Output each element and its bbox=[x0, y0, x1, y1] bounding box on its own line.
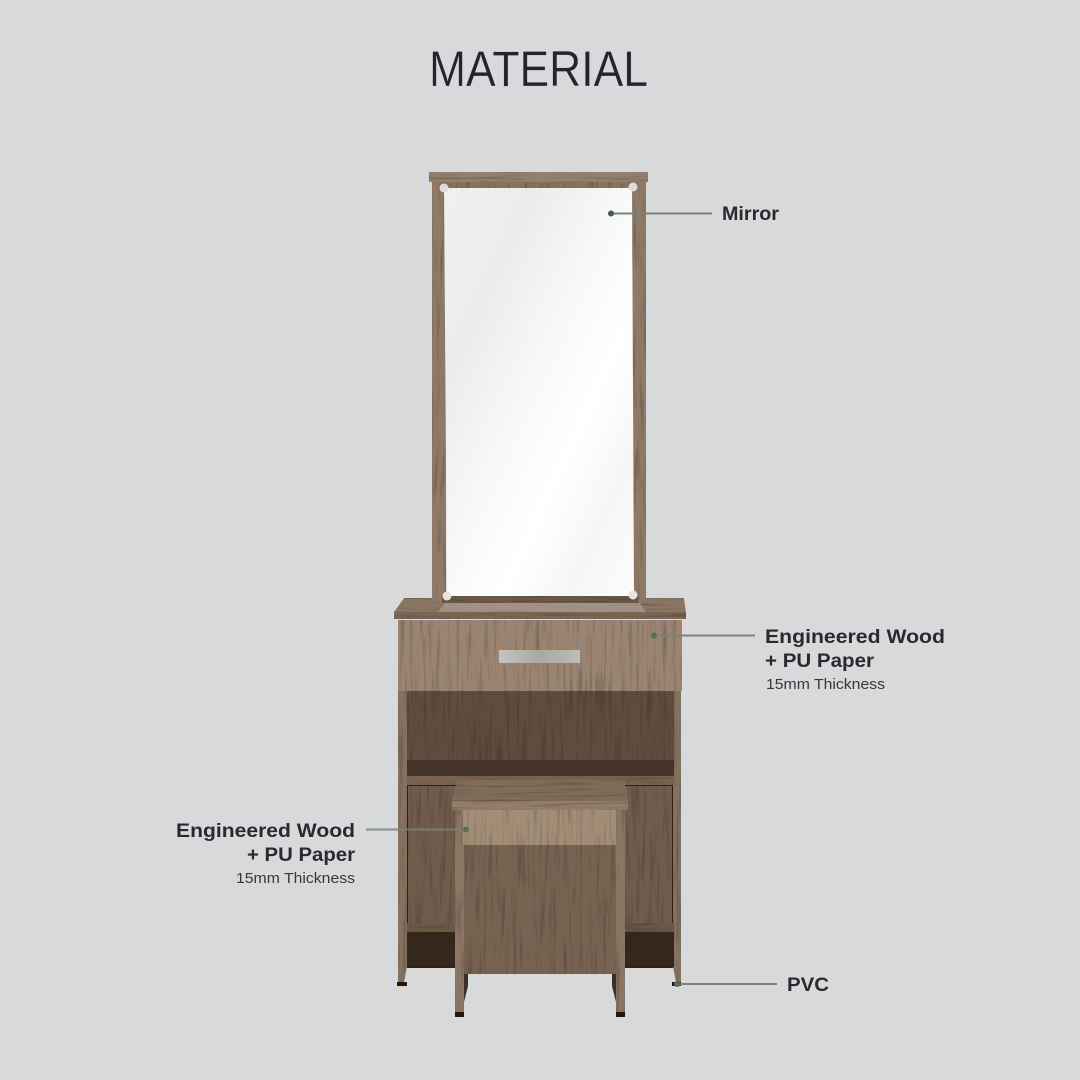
callout: stool engineered wood: 15mm Thickness bbox=[236, 870, 355, 887]
dressing table bbox=[394, 598, 686, 986]
mirror with frame bbox=[429, 172, 648, 603]
stool bbox=[452, 780, 628, 1017]
callout: table engineered wood bbox=[651, 627, 945, 693]
callout: PVC: PVC bbox=[787, 975, 829, 996]
callout: stool engineered wood bbox=[176, 821, 469, 887]
callout: stool engineered wood: + PU Paper bbox=[247, 845, 356, 866]
callout: stool engineered wood: Engineered Wood bbox=[176, 821, 355, 842]
callout: table engineered wood: + PU Paper bbox=[765, 651, 875, 672]
drawer handle bbox=[499, 650, 580, 663]
callout: mirror: Mirror bbox=[722, 204, 780, 225]
callout: table engineered wood: Engineered Wood bbox=[765, 627, 945, 648]
callout: mirror bbox=[608, 204, 780, 225]
callout: table engineered wood: 15mm Thickness bbox=[766, 676, 885, 693]
callout: PVC bbox=[674, 975, 829, 996]
illustration: dressing table with mirror and stool bbox=[394, 172, 686, 1017]
title: MATERIAL bbox=[429, 41, 648, 97]
